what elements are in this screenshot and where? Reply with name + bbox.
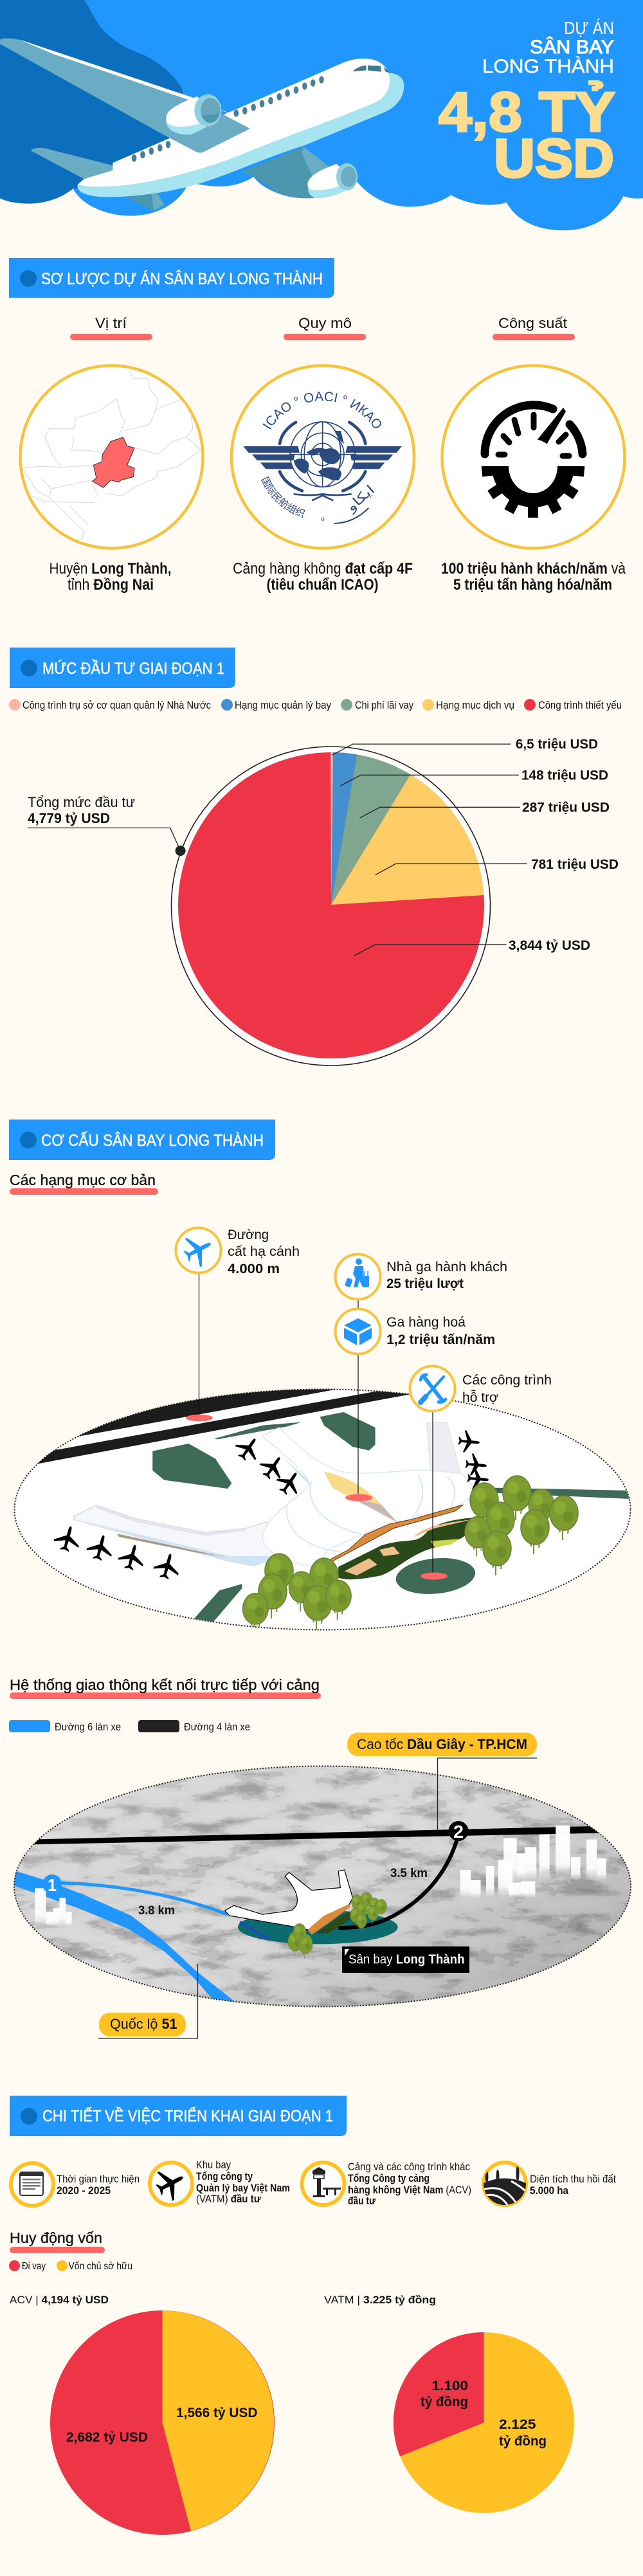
pie chart: VATM: 1.100 xyxy=(432,2379,468,2393)
diagram: airport plan xyxy=(14,1383,640,1633)
pie legend: Hạng mục quản lý bay xyxy=(235,699,331,711)
icon: control tower xyxy=(312,2167,341,2197)
runways xyxy=(78,1389,337,1437)
mini terminal xyxy=(225,1870,353,1930)
map: road connections: 3.5 km xyxy=(390,1867,428,1880)
subheading: transport system: Hệ thống giao thông kết nối trực tiếp với cảng xyxy=(10,1676,320,1693)
panel: capacity: 100 triệu hành khách/năm và xyxy=(441,560,626,577)
plane silhouettes xyxy=(52,1430,489,1582)
terminal building xyxy=(74,1505,287,1566)
item: timeline: 2020 - 2025 xyxy=(57,2184,111,2197)
marker 1: 1 xyxy=(48,1875,57,1895)
item: airport and other works: Cảng và các công trình khác xyxy=(348,2161,470,2173)
hero title: LONG THÀNH xyxy=(482,56,614,77)
callout: passenger terminal: 25 triệu lượt xyxy=(386,1276,464,1291)
map of Long Thanh xyxy=(23,368,201,540)
label: expressway: Cao tốc Dầu Giây - TP.HCM xyxy=(357,1736,527,1752)
panel: scale xyxy=(230,315,415,594)
green areas xyxy=(152,1444,231,1489)
marker 2 xyxy=(449,1821,468,1842)
pie chart: phase 1 investment: 6,5 triệu USD xyxy=(516,737,598,752)
item: land area xyxy=(484,2163,616,2206)
map: road connections: 3.8 km xyxy=(138,1904,175,1918)
section header: overview xyxy=(9,258,334,298)
mini trees xyxy=(288,1892,386,1959)
callout: passenger terminal: Nhà ga hành khách xyxy=(386,1260,507,1274)
subheading: fundraising: Huy động vốn xyxy=(10,2229,102,2246)
pie chart: VATM: tỷ đồng xyxy=(421,2395,468,2409)
pie legend: Chi phí lãi vay xyxy=(355,699,413,711)
hero title: DỰ ÁN xyxy=(564,18,614,38)
section header: structure: CƠ CẤU SÂN BAY LONG THÀNH xyxy=(41,1131,264,1150)
callout: cargo terminal xyxy=(336,1309,495,1501)
pie chart: phase 1 investment xyxy=(28,707,619,1066)
dark cloud blob xyxy=(0,0,188,204)
item: land area: Diện tích thu hồi đất xyxy=(530,2173,616,2185)
label: expressway xyxy=(347,1732,537,1831)
pie chart: phase 1 investment: 287 triệu USD xyxy=(522,800,610,815)
hero title xyxy=(439,18,615,188)
callout: support works: Các công trình xyxy=(462,1373,552,1388)
item: flight zone: Tổng công ty xyxy=(196,2170,253,2182)
icon: traveler xyxy=(345,1258,369,1287)
item: airport and other works: đầu tư xyxy=(348,2195,376,2207)
pie legend: Hạng mục dịch vụ xyxy=(436,699,514,711)
panel: location: Vị trí xyxy=(95,315,127,331)
icon: plane xyxy=(151,2163,190,2204)
section header: overview: SƠ LƯỢC DỰ ÁN SÂN BAY LONG THÀNH xyxy=(41,269,323,288)
hero cloud background xyxy=(0,0,643,230)
callout: runway xyxy=(176,1228,300,1421)
road legend xyxy=(9,1720,250,1733)
panel: scale: Cảng hàng không đạt cấp 4F xyxy=(233,560,413,577)
section header: investment: MỨC ĐẦU TƯ GIAI ĐOẠN 1 xyxy=(42,659,224,678)
map: road connections xyxy=(12,1765,633,2008)
pie chart: phase 1 investment: 781 triệu USD xyxy=(531,857,619,872)
pie chart: phase 1 investment: 4,779 tỷ USD xyxy=(28,810,110,826)
item: timeline xyxy=(11,2163,140,2206)
panel: capacity xyxy=(441,315,626,594)
icon: ICAO emblem: 国际民航组织 xyxy=(261,476,305,518)
callout: runway: 4.000 m xyxy=(228,1262,280,1276)
section header: structure xyxy=(9,1120,275,1160)
pie chart: ACV: ACV | 4,194 tỷ USD xyxy=(10,2294,109,2306)
city skyline xyxy=(35,1826,606,1926)
subheading: basic items: Các hạng mục cơ bản xyxy=(10,1172,156,1188)
funding legend: Đi vay xyxy=(22,2261,46,2272)
icon: ICAO emblem: ايكاو xyxy=(343,482,377,515)
section header: investment xyxy=(10,648,235,688)
marker 1 xyxy=(42,1874,62,1895)
pie legend xyxy=(9,699,622,711)
icon: calendar xyxy=(20,2172,43,2195)
marker 2: 2 xyxy=(453,1822,464,1842)
pie chart: phase 1 investment: 148 triệu USD xyxy=(521,768,608,783)
item: timeline: Thời gian thực hiện xyxy=(57,2173,140,2185)
pie chart: ACV xyxy=(10,2294,275,2535)
trees xyxy=(243,1476,578,1633)
hero title: 4,8 TỶ xyxy=(439,80,615,143)
callout: support works xyxy=(410,1366,552,1579)
hero banner xyxy=(0,0,643,230)
icon: box xyxy=(344,1318,372,1345)
callout: runway: Đường xyxy=(228,1228,269,1242)
label: airport xyxy=(342,1946,469,1973)
pie legend: Công trình thiết yếu xyxy=(538,699,622,711)
panel: scale: Quy mô xyxy=(298,315,352,331)
callout: cargo terminal: 1,2 triệu tấn/năm xyxy=(386,1332,495,1347)
pie chart: VATM xyxy=(324,2294,574,2513)
pie chart: ACV: 1,566 tỷ USD xyxy=(176,2406,257,2420)
callout: support works: hỗ trợ xyxy=(462,1390,498,1405)
road legend: Đường 6 làn xe xyxy=(55,1721,121,1733)
icon: ICAO emblem xyxy=(243,392,402,524)
airport pad xyxy=(238,1910,398,1944)
item: flight zone: (VATM) đầu tư xyxy=(196,2193,261,2205)
hero title: USD xyxy=(494,128,614,188)
funding legend: Vốn chủ sở hữu xyxy=(68,2261,132,2272)
pie legend: Công trình trụ sở cơ quan quản lý Nhà Nước xyxy=(23,699,211,711)
item: land area: 5.000 ha xyxy=(530,2184,568,2197)
pie chart: phase 1 investment: 3,844 tỷ USD xyxy=(509,938,590,953)
section header: phase 1 details: CHI TIẾT VỀ VIỆC TRIỂN KHAI GIAI ĐOẠN 1 xyxy=(42,2107,333,2125)
pie chart: ACV: 2,682 tỷ USD xyxy=(66,2430,148,2445)
road legend: Đường 4 làn xe xyxy=(184,1721,250,1733)
pie chart: VATM: VATM | 3.225 tỷ đồng xyxy=(324,2294,436,2306)
callout: cargo terminal: Ga hàng hoá xyxy=(386,1315,466,1330)
pie chart: phase 1 investment: Tổng mức đầu tư xyxy=(28,794,135,810)
icon: gauge and gear xyxy=(482,405,584,518)
section header: phase 1 details xyxy=(10,2096,347,2136)
highway 51 xyxy=(12,1870,242,2007)
hero title: SÂN BAY xyxy=(530,37,614,58)
callout: passenger terminal xyxy=(336,1254,507,1308)
label: national road 51: Quốc lộ 51 xyxy=(110,2016,177,2032)
panel: location xyxy=(21,315,203,594)
item: flight zone xyxy=(150,2159,290,2205)
item: airport and other works: hàng không Việt Nam (ACV) xyxy=(348,2184,471,2196)
panel: location: Huyện Long Thành, xyxy=(49,560,171,577)
illustration: airplane xyxy=(0,39,404,211)
pie chart: VATM: 2.125 xyxy=(499,2417,536,2432)
label: airport: Sân bay Long Thành xyxy=(349,1952,464,1966)
panel: capacity: Công suất xyxy=(498,315,567,331)
panel: location: tỉnh Đồng Nai xyxy=(68,576,154,594)
pie chart: VATM: tỷ đồng xyxy=(499,2434,547,2449)
icon: plane xyxy=(179,1229,218,1271)
icon: fields xyxy=(484,2166,527,2206)
funding legend xyxy=(9,2260,132,2272)
label: national road 51 xyxy=(98,1964,198,2038)
item: flight zone: Quản lý bay Việt Nam xyxy=(196,2182,290,2194)
item: airport and other works: Tổng Công ty cảng xyxy=(348,2172,430,2184)
callout: runway: cất hạ cánh xyxy=(228,1244,300,1259)
item: airport and other works xyxy=(302,2161,471,2207)
icon: wrench and screwdriver xyxy=(421,1375,446,1402)
subheading: fundraising xyxy=(10,2229,105,2253)
icon: ICAO emblem: ICAO ° OACI ° ИКАО xyxy=(262,392,381,430)
expressway xyxy=(33,1826,599,1844)
panel: scale: (tiêu chuẩn ICAO) xyxy=(266,576,378,594)
item: flight zone: Khu bay xyxy=(196,2159,231,2171)
panel: capacity: 5 triệu tấn hàng hóa/năm xyxy=(453,576,612,594)
